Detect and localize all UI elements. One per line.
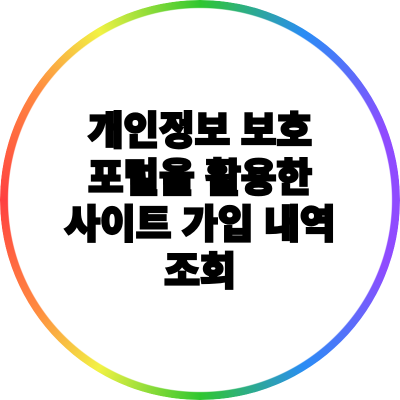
title: 조회 xyxy=(164,251,236,294)
title: 개인정보 보호 xyxy=(88,110,312,154)
title: 사이트 가입 내역 xyxy=(64,204,336,247)
title: 포털을 활용한 xyxy=(88,158,312,200)
